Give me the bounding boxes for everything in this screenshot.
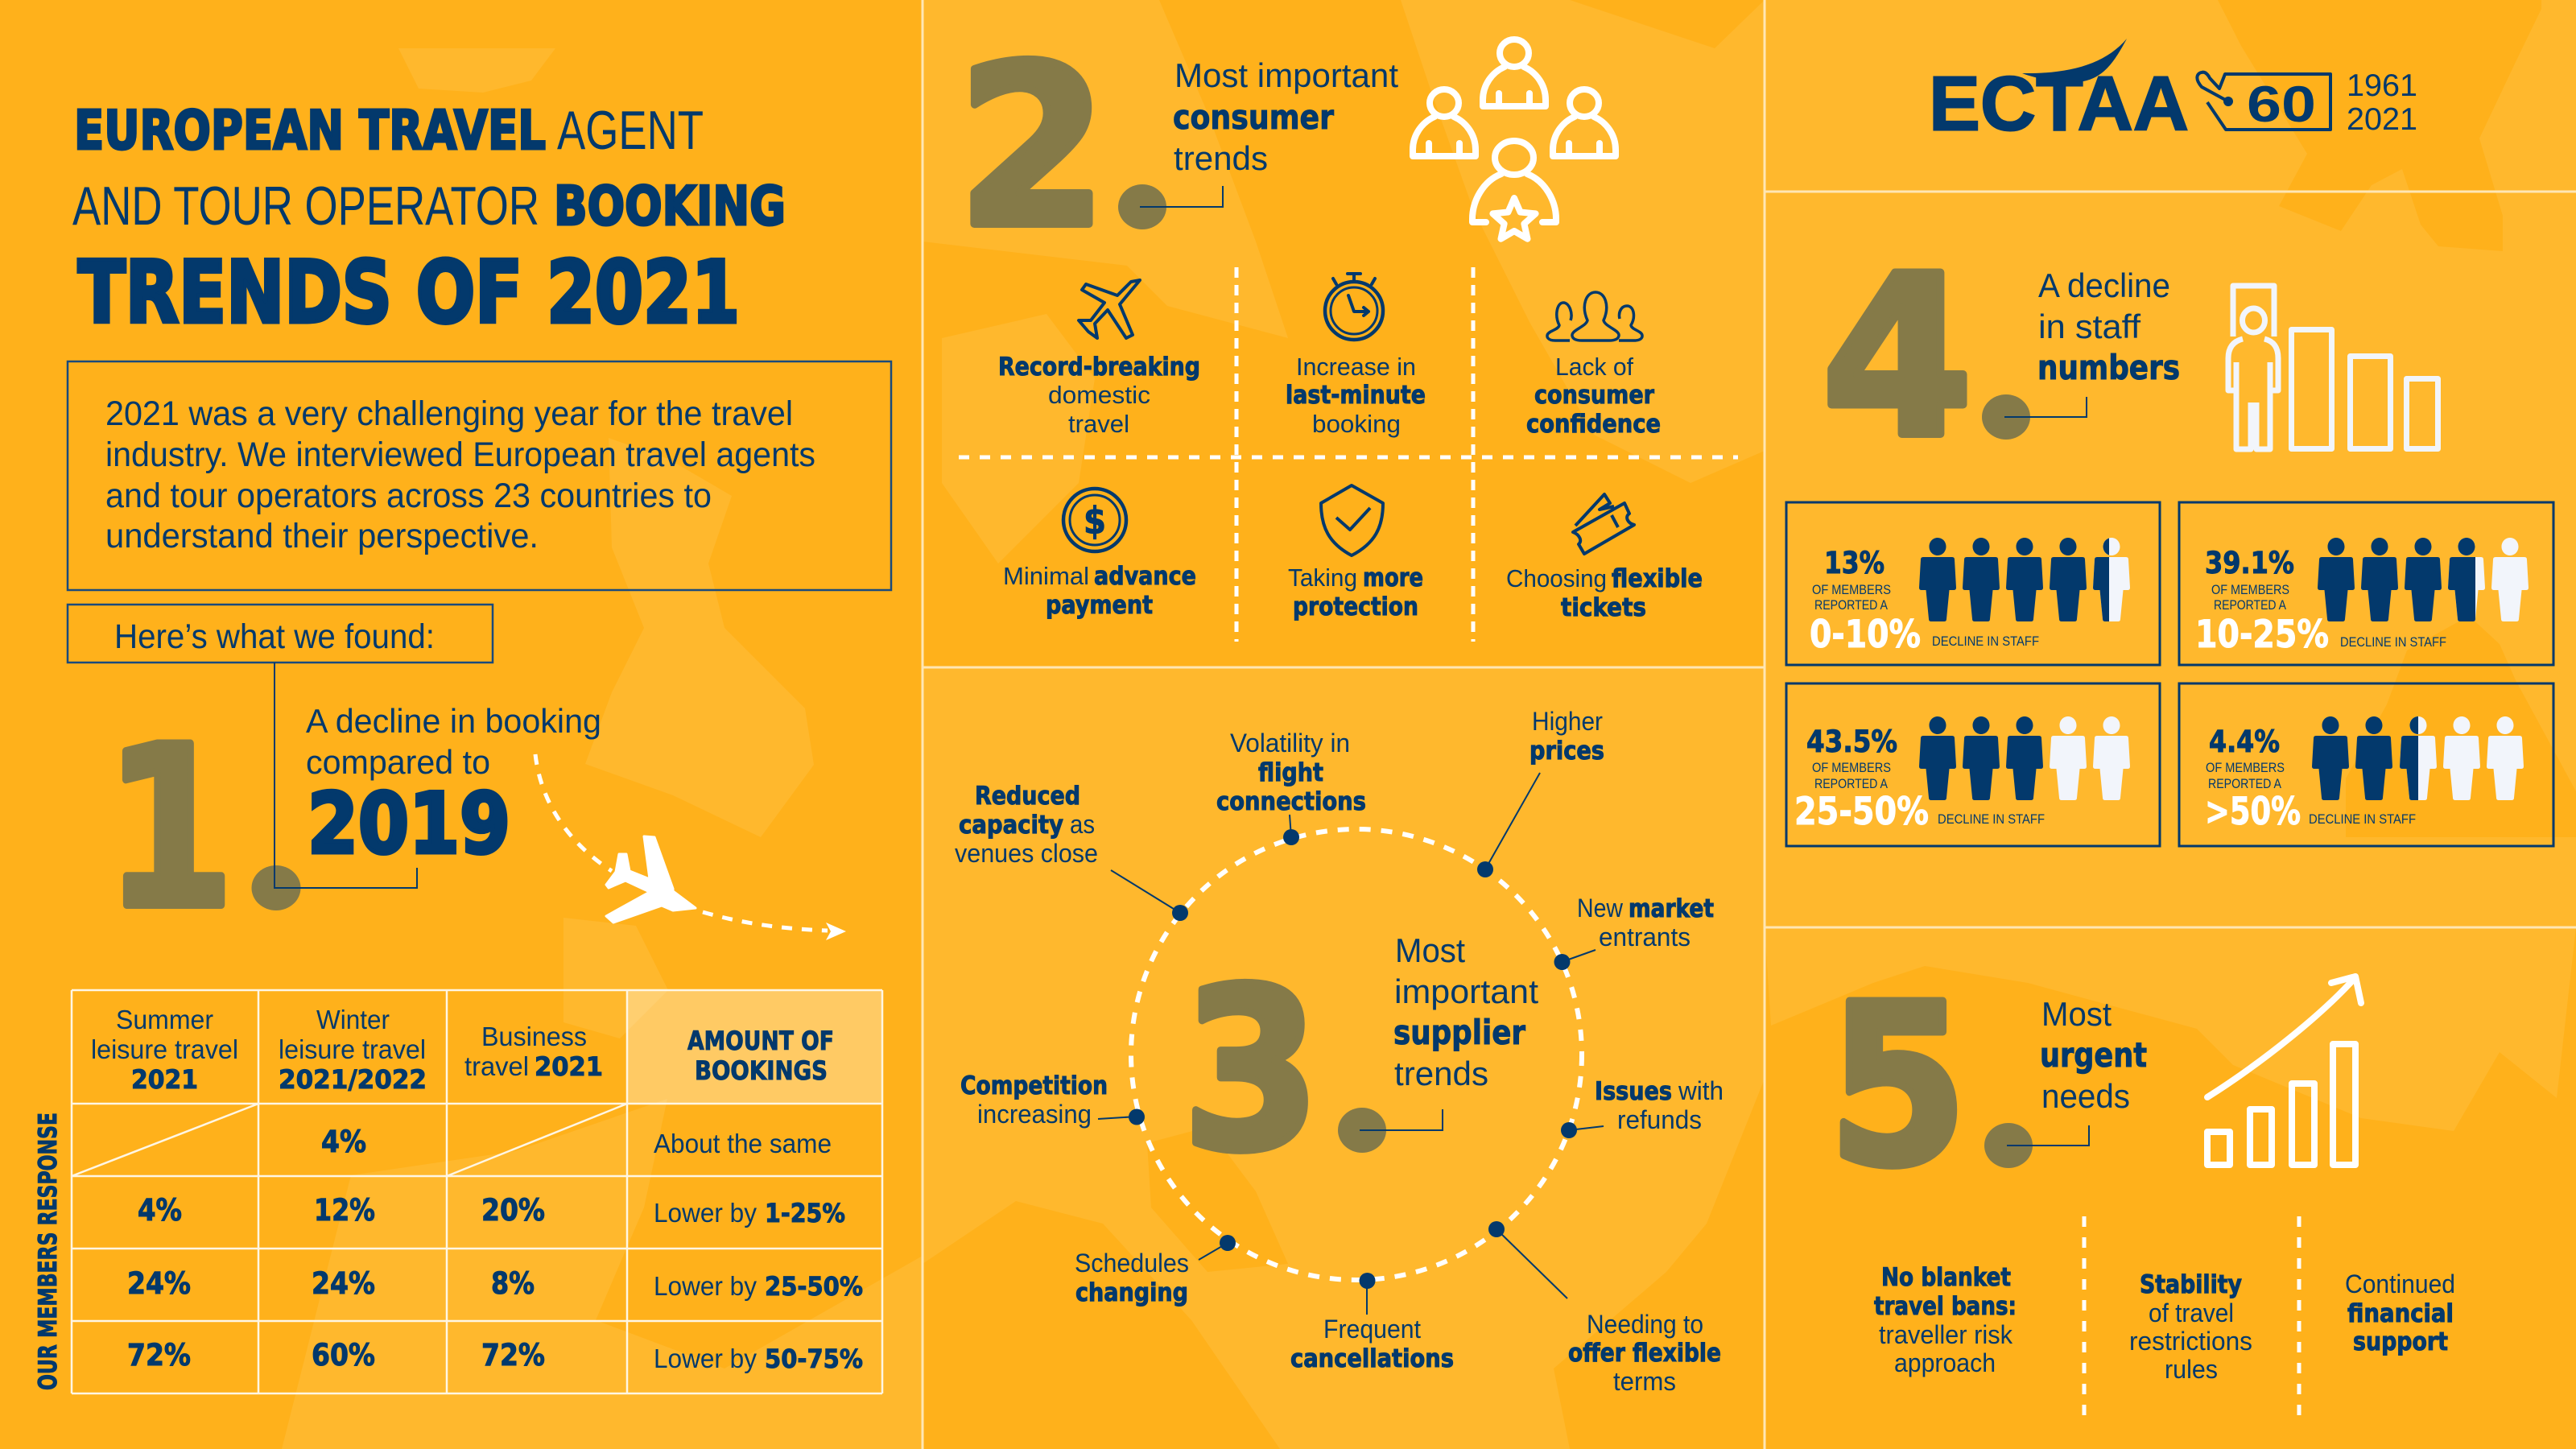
supplier trend: competition increasing: Competition xyxy=(960,1071,1108,1100)
urgent need: stability of restrictions: restrictions xyxy=(2129,1327,2252,1356)
bookings table: 60% xyxy=(312,1338,375,1373)
bookings table: 20% xyxy=(481,1193,545,1228)
section 5 heading: needs xyxy=(2041,1077,2130,1115)
trend: minimal advance payment: payment xyxy=(1046,591,1153,620)
ECTAA logo: ECTAA xyxy=(1929,61,2189,147)
staff panel: 10-25%: REPORTED A xyxy=(2214,598,2286,613)
bookings table: Business xyxy=(481,1022,587,1051)
supplier trend: new market entrants xyxy=(1577,894,1714,952)
urgent need: stability of restrictions: Stability xyxy=(2140,1270,2242,1299)
supplier trend: new market entrants: entrants xyxy=(1599,923,1690,952)
trend: last-minute booking: booking xyxy=(1312,410,1401,438)
title: EUROPEAN TRAVEL xyxy=(74,99,546,162)
supplier trend: new market entrants: New xyxy=(1577,894,1624,923)
bookings table: About the same xyxy=(654,1129,832,1158)
intro text box: 2021 was a very challenging year for the travel xyxy=(105,394,793,433)
trend: flexible tickets: flexible xyxy=(1612,564,1703,593)
supplier trend: frequent cancellations xyxy=(1290,1315,1454,1373)
bookings table: Summer xyxy=(116,1005,213,1034)
supplier trend: offer flexible terms xyxy=(1568,1310,1721,1396)
staff panel: over 50%: DECLINE IN STAFF xyxy=(2309,811,2416,827)
plane with dashed flight path xyxy=(535,754,846,940)
bookings table xyxy=(72,990,882,1393)
found box xyxy=(68,605,493,663)
supplier trend: flight connections: Volatility in xyxy=(1230,729,1350,758)
supplier trend: flight connections xyxy=(1216,729,1366,816)
trend: lack of consumer confidence: Lack of xyxy=(1555,353,1633,381)
staff panel: 10-25%: OF MEMBERS xyxy=(2211,583,2289,597)
staff panel: 10-25%: 39.1% xyxy=(2205,546,2294,580)
section 1 heading: 2019 xyxy=(308,776,510,873)
urgent need: continued financial support: financial xyxy=(2347,1299,2454,1328)
trend: more protection: Taking xyxy=(1288,564,1357,592)
title: AND TOUR OPERATOR xyxy=(72,175,539,237)
section 2 heading: trends xyxy=(1174,139,1268,177)
supplier trend: new market entrants: market xyxy=(1629,894,1714,923)
urgent need: continued financial support: Continued xyxy=(2345,1269,2455,1298)
bookings table: 24% xyxy=(312,1266,375,1301)
supplier trend: issues with refunds xyxy=(1595,1076,1724,1134)
section 1 heading: compared to xyxy=(306,743,490,781)
ECTAA logo xyxy=(1929,39,2417,147)
bookings table: 8% xyxy=(491,1266,535,1301)
supplier trend: competition increasing: increasing xyxy=(977,1100,1092,1129)
consumer trends dashed grid xyxy=(959,267,1738,642)
staff panel: 25-50%: 43.5% xyxy=(1806,724,1897,759)
trend: minimal advance payment: advance xyxy=(1094,562,1196,591)
staff panel: over 50% xyxy=(2179,683,2553,846)
staff panel: 25-50%: REPORTED A xyxy=(1814,777,1888,791)
section 5 number xyxy=(1828,957,2089,1215)
trend: minimal advance payment: Minimal xyxy=(1003,562,1089,590)
supplier callout connectors and dots xyxy=(1098,773,1604,1315)
supplier trend: schedules changing: Schedules xyxy=(1075,1249,1189,1278)
supplier trend: offer flexible terms: Needing to xyxy=(1587,1310,1703,1339)
bookings table: 72% xyxy=(481,1338,545,1373)
section 1 heading xyxy=(306,702,601,873)
bookings table: travel xyxy=(464,1051,529,1081)
section 4 heading: numbers xyxy=(2037,348,2180,387)
section 5 heading: Most xyxy=(2041,995,2112,1033)
section 1 heading: A decline in booking xyxy=(306,702,601,740)
staff panel: 0-10%: REPORTED A xyxy=(1814,598,1888,613)
urgent need: continued financial support xyxy=(2345,1269,2455,1356)
supplier trend: issues with refunds: refunds xyxy=(1617,1105,1702,1134)
urgent need: no blanket travel bans: approach xyxy=(1894,1348,1996,1377)
section 4 heading: A decline xyxy=(2038,266,2170,304)
ECTAA logo: 1961 xyxy=(2347,68,2417,103)
section 2 number: 2 xyxy=(957,19,1108,276)
staff panel: over 50%: OF MEMBERS xyxy=(2206,761,2285,775)
trend: record-breaking domestic travel: Record-breaking xyxy=(998,353,1200,382)
urgent need: stability of restrictions xyxy=(2129,1270,2252,1384)
staff panel: 25-50% xyxy=(1786,683,2160,846)
bookings table: leisure travel xyxy=(91,1034,238,1064)
bookings table: Lower by xyxy=(654,1271,757,1301)
supplier trend: flight connections: connections xyxy=(1216,787,1366,816)
trend: last-minute booking xyxy=(1286,274,1426,438)
section 4 number: 4 xyxy=(1822,229,1973,486)
trend: record-breaking domestic travel: travel xyxy=(1068,410,1129,438)
section 3 heading: trends xyxy=(1394,1055,1488,1092)
trend: more protection: protection xyxy=(1293,592,1418,621)
trend: last-minute booking: Increase in xyxy=(1296,353,1416,381)
bookings table: AMOUNT OF xyxy=(687,1026,834,1056)
supplier trend: higher prices xyxy=(1530,707,1604,766)
staff panel: 0-10%: DECLINE IN STAFF xyxy=(1932,634,2039,649)
urgent need: stability of restrictions: rules xyxy=(2165,1355,2218,1384)
section 2 heading: Most important xyxy=(1174,56,1398,94)
bookings table: 72% xyxy=(127,1338,191,1373)
section 3 heading xyxy=(1393,931,1538,1092)
section 1 number xyxy=(105,663,417,957)
bookings table: Lower by xyxy=(654,1344,757,1373)
staff panel: 10-25%: 10-25% xyxy=(2195,613,2329,657)
supplier trend: frequent cancellations: Frequent xyxy=(1323,1315,1421,1344)
staff panel: 25-50%: DECLINE IN STAFF xyxy=(1938,811,2045,827)
intro text box: industry. We interviewed European travel agents xyxy=(105,436,815,474)
urgent need: no blanket travel bans xyxy=(1874,1263,2017,1377)
supplier trend: offer flexible terms: offer flexible xyxy=(1568,1339,1721,1368)
staff panel: over 50%: >50% xyxy=(2205,790,2301,834)
supplier trend: competition increasing xyxy=(960,1071,1108,1129)
trend: lack of consumer confidence xyxy=(1526,292,1661,439)
supplier trend: schedules changing xyxy=(1075,1249,1189,1307)
section 4 heading: in staff xyxy=(2038,308,2140,345)
trend: minimal advance payment xyxy=(1003,489,1196,620)
bookings table: 4% xyxy=(138,1193,182,1228)
supplier trend: higher prices: Higher xyxy=(1532,707,1603,736)
supplier trends dashed ring xyxy=(1131,829,1582,1280)
staff panel: 0-10%: 13% xyxy=(1824,546,1885,580)
section 3 heading: Most xyxy=(1395,931,1465,969)
trend: lack of consumer confidence: consumer xyxy=(1534,381,1655,410)
section 5 heading: urgent xyxy=(2040,1035,2147,1075)
trend: last-minute booking: last-minute xyxy=(1286,381,1426,410)
section 1 number: 1 xyxy=(105,700,234,957)
section 5 heading xyxy=(2040,995,2147,1115)
staff panel: over 50%: 4.4% xyxy=(2209,724,2280,759)
icon: group of consumers with star xyxy=(1413,39,1616,239)
bookings table: 2021 xyxy=(535,1051,603,1082)
supplier trend: schedules changing: changing xyxy=(1075,1278,1188,1307)
ECTAA logo: 60 xyxy=(2247,76,2316,133)
section 3 heading: important xyxy=(1394,972,1538,1010)
intro text box: and tour operators across 23 countries to xyxy=(105,477,712,515)
section 3 number: 3 xyxy=(1183,942,1320,1199)
section 3 heading: supplier xyxy=(1393,1013,1525,1052)
trend: record-breaking domestic travel: domestic xyxy=(1048,381,1150,409)
trend: minimal advance payment: $ xyxy=(1084,499,1106,543)
urgent need: no blanket travel bans: traveller risk xyxy=(1879,1320,2013,1349)
bookings table: 1-25% xyxy=(765,1198,845,1228)
trend: record-breaking domestic travel xyxy=(998,280,1200,438)
ECTAA logo: 2021 xyxy=(2347,102,2417,137)
needs dashed dividers xyxy=(2084,1216,2299,1418)
staff panel: 25-50%: OF MEMBERS xyxy=(1812,761,1891,775)
title: BOOKING xyxy=(554,175,786,237)
staff panel: 25-50%: 25-50% xyxy=(1794,790,1929,834)
trend: more protection: more xyxy=(1363,564,1423,592)
trend: flexible tickets: tickets xyxy=(1561,593,1646,622)
bookings table: BOOKINGS xyxy=(695,1055,828,1086)
supplier trend: flight connections: flight xyxy=(1258,758,1323,787)
trend: more protection xyxy=(1288,485,1423,621)
title: AGENT xyxy=(557,100,704,161)
bookings table: 2021/2022 xyxy=(279,1064,427,1095)
staff panel: 10-25%: DECLINE IN STAFF xyxy=(2340,634,2446,650)
urgent need: continued financial support: support xyxy=(2353,1327,2448,1356)
section 3 number xyxy=(1183,942,1443,1199)
supplier trend: frequent cancellations: cancellations xyxy=(1290,1344,1454,1373)
staff panel: 0-10%: 0-10% xyxy=(1810,613,1921,657)
bookings table: 2021 xyxy=(131,1064,198,1095)
title: TRENDS OF 2021 xyxy=(78,243,740,342)
supplier trend: higher prices: prices xyxy=(1530,737,1604,766)
section 2 number xyxy=(957,19,1223,276)
section 4 number xyxy=(1822,229,2087,486)
section 2 heading: consumer xyxy=(1173,97,1334,137)
icon: rising bars and arrow xyxy=(2207,976,2361,1165)
bookings table: 25-50% xyxy=(765,1271,863,1302)
bookings table: Lower by xyxy=(654,1198,757,1228)
staff panel: over 50%: REPORTED A xyxy=(2208,777,2281,791)
found box: Here’s what we found: xyxy=(114,617,435,656)
supplier trend: reduced capacity: venues close xyxy=(955,839,1098,868)
staff panel: 0-10% xyxy=(1786,502,2160,665)
bookings table: Winter xyxy=(316,1005,390,1034)
urgent need: no blanket travel bans: travel bans: xyxy=(1874,1292,2017,1321)
section 2 heading xyxy=(1173,56,1398,177)
title xyxy=(72,99,786,342)
intro text box: understand their perspective. xyxy=(105,517,539,555)
supplier trend: reduced capacity: capacity xyxy=(959,811,1063,840)
bookings table: 4% xyxy=(321,1125,366,1159)
bookings table: 50-75% xyxy=(765,1344,863,1374)
supplier trend: issues with refunds: with xyxy=(1678,1076,1724,1105)
urgent need: no blanket travel bans: No blanket xyxy=(1881,1263,2011,1292)
bookings table: 12% xyxy=(314,1193,375,1228)
icon: staff decline person and bars xyxy=(2228,286,2438,449)
supplier trend: reduced capacity: as xyxy=(1070,810,1095,839)
intro text box xyxy=(68,361,891,590)
supplier trend: offer flexible terms: terms xyxy=(1613,1367,1676,1396)
section 5 number: 5 xyxy=(1828,957,1967,1215)
supplier trend: reduced capacity: Reduced xyxy=(975,782,1080,811)
section 4 heading xyxy=(2037,266,2180,387)
staff panel: 10-25% xyxy=(2179,502,2553,665)
supplier trend: reduced capacity xyxy=(955,782,1098,868)
bookings table: 24% xyxy=(127,1266,191,1301)
staff panel: 0-10%: OF MEMBERS xyxy=(1812,583,1891,597)
urgent need: stability of restrictions: of travel xyxy=(2149,1298,2234,1327)
supplier trend: issues with refunds: Issues xyxy=(1595,1077,1672,1106)
bookings table: leisure travel xyxy=(279,1034,426,1064)
table row axis label: OUR MEMBERS RESPONSE xyxy=(34,1113,63,1390)
trend: lack of consumer confidence: confidence xyxy=(1526,410,1661,439)
trend: flexible tickets: Choosing xyxy=(1506,564,1607,592)
trend: flexible tickets xyxy=(1506,494,1703,622)
